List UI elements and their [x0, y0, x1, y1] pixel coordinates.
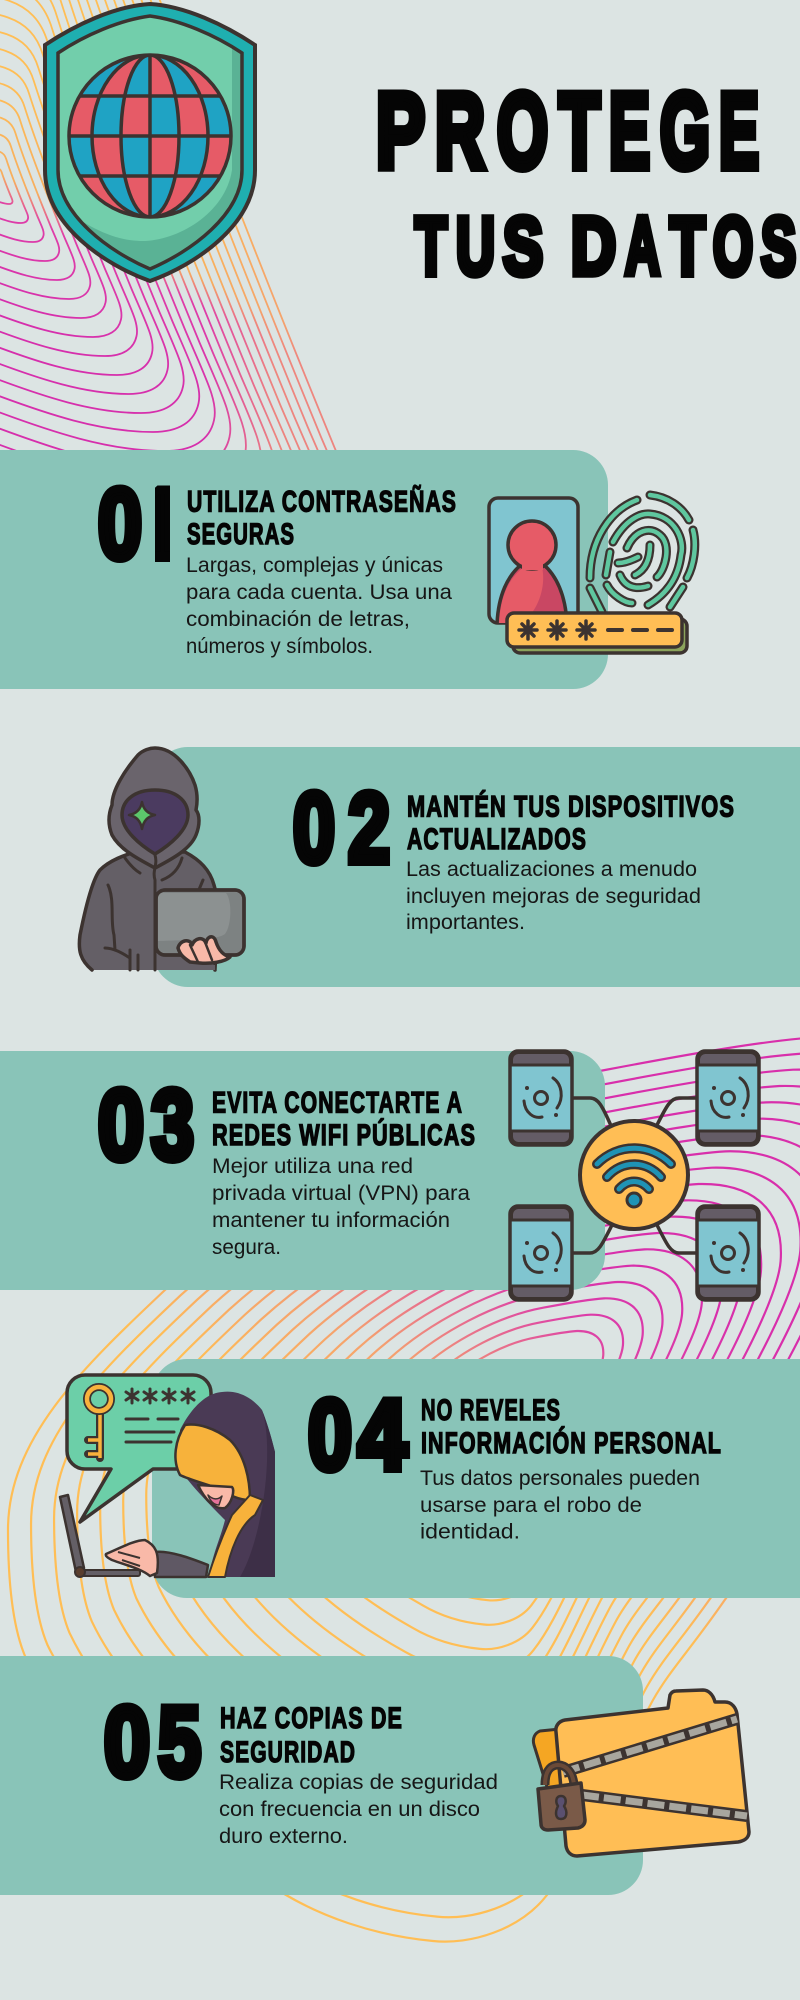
body text: Tus datos personales pueden [420, 1467, 700, 1490]
panel background [0, 1051, 605, 1290]
heading: SEGURAS [187, 518, 295, 551]
heading [187, 484, 457, 551]
icon: wifi network with phones [510, 1051, 759, 1300]
body text [219, 1771, 498, 1848]
number: 4 [358, 1379, 407, 1490]
heading: NO REVELES [421, 1394, 561, 1427]
title line 2: U [456, 201, 495, 292]
panel 3: wifi [0, 1051, 759, 1300]
body text: incluyen mejoras de seguridad [406, 885, 701, 908]
number: 0 [308, 1379, 352, 1490]
body text [420, 1467, 700, 1544]
body text: importantes. [406, 911, 525, 934]
heading: REDES WIFI PÚBLICAS [212, 1118, 476, 1152]
heading: ACTUALIZADOS [407, 823, 587, 856]
icon: id card, fingerprint and password [489, 495, 695, 653]
body text: identidad. [420, 1520, 520, 1544]
number: 2 [348, 772, 390, 883]
title line 1: R [435, 70, 485, 190]
panel 2: dispositivos [79, 747, 800, 987]
body text: mantener tu información [212, 1209, 450, 1232]
heading [220, 1702, 403, 1769]
heading: HAZ COPIAS DE [220, 1702, 403, 1735]
body text: para cada cuenta. Usa una [186, 581, 452, 604]
heading: SEGURIDAD [220, 1736, 356, 1769]
body text: usarse para el robo de [420, 1494, 642, 1517]
number: 0 [98, 468, 142, 579]
panel background [0, 450, 608, 689]
panel 5: copias de seguridad [0, 1656, 749, 1895]
body text: con frecuencia en un disco [219, 1798, 480, 1821]
number: 5 [158, 1686, 201, 1797]
body text [186, 554, 452, 658]
body text [212, 1155, 470, 1259]
panel background [0, 1656, 643, 1895]
heading: EVITA CONECTARTE A [212, 1086, 463, 1120]
number: 3 [151, 1069, 194, 1180]
heading [407, 790, 735, 856]
body text: Mejor utiliza una red [212, 1155, 413, 1178]
body text [406, 858, 701, 934]
body text: combinación de letras, [186, 608, 410, 631]
number: 1 [141, 468, 181, 579]
number: 0 [293, 772, 335, 883]
body text: segura. [212, 1236, 281, 1259]
icon: folder with chains and padlock [533, 1690, 749, 1856]
title line 2: T [415, 201, 447, 292]
number: 0 [104, 1686, 150, 1797]
title line 2: T [670, 201, 705, 292]
icon: shield with globe [45, 4, 255, 281]
panel 1: contraseñas [0, 450, 695, 689]
body text: Largas, complejas y únicas [186, 554, 443, 577]
panel background [153, 747, 800, 987]
icon: hooded hacker with laptop [79, 748, 244, 970]
title line 2: O [713, 201, 753, 292]
heading [421, 1394, 722, 1460]
title line 1: E [609, 70, 650, 190]
title line 1: G [660, 70, 710, 190]
title line 1: T [559, 70, 600, 190]
number: 0 [98, 1069, 144, 1180]
title line 2: A [625, 201, 660, 292]
body text: Las actualizaciones a menudo [406, 858, 697, 881]
body text: privada virtual (VPN) para [212, 1182, 470, 1205]
title line 1: P [376, 70, 425, 190]
title line 2: S [503, 201, 543, 292]
heading [212, 1086, 476, 1152]
body text: Realiza copias de seguridad [219, 1771, 498, 1794]
panel 4: información personal [60, 1359, 800, 1598]
panel background [152, 1359, 800, 1598]
title line 1: E [719, 70, 759, 190]
heading: UTILIZA CONTRASEÑAS [187, 484, 457, 518]
body text: números y símbolos. [186, 635, 373, 658]
contour lines: top left [0, 0, 336, 450]
contour lines: centre [0, 1020, 800, 1960]
title line 2: D [571, 201, 616, 292]
title line 1: O [497, 70, 548, 190]
icon: hacker stealing password [60, 1375, 275, 1577]
title [376, 70, 796, 292]
body text: duro externo. [219, 1825, 348, 1848]
